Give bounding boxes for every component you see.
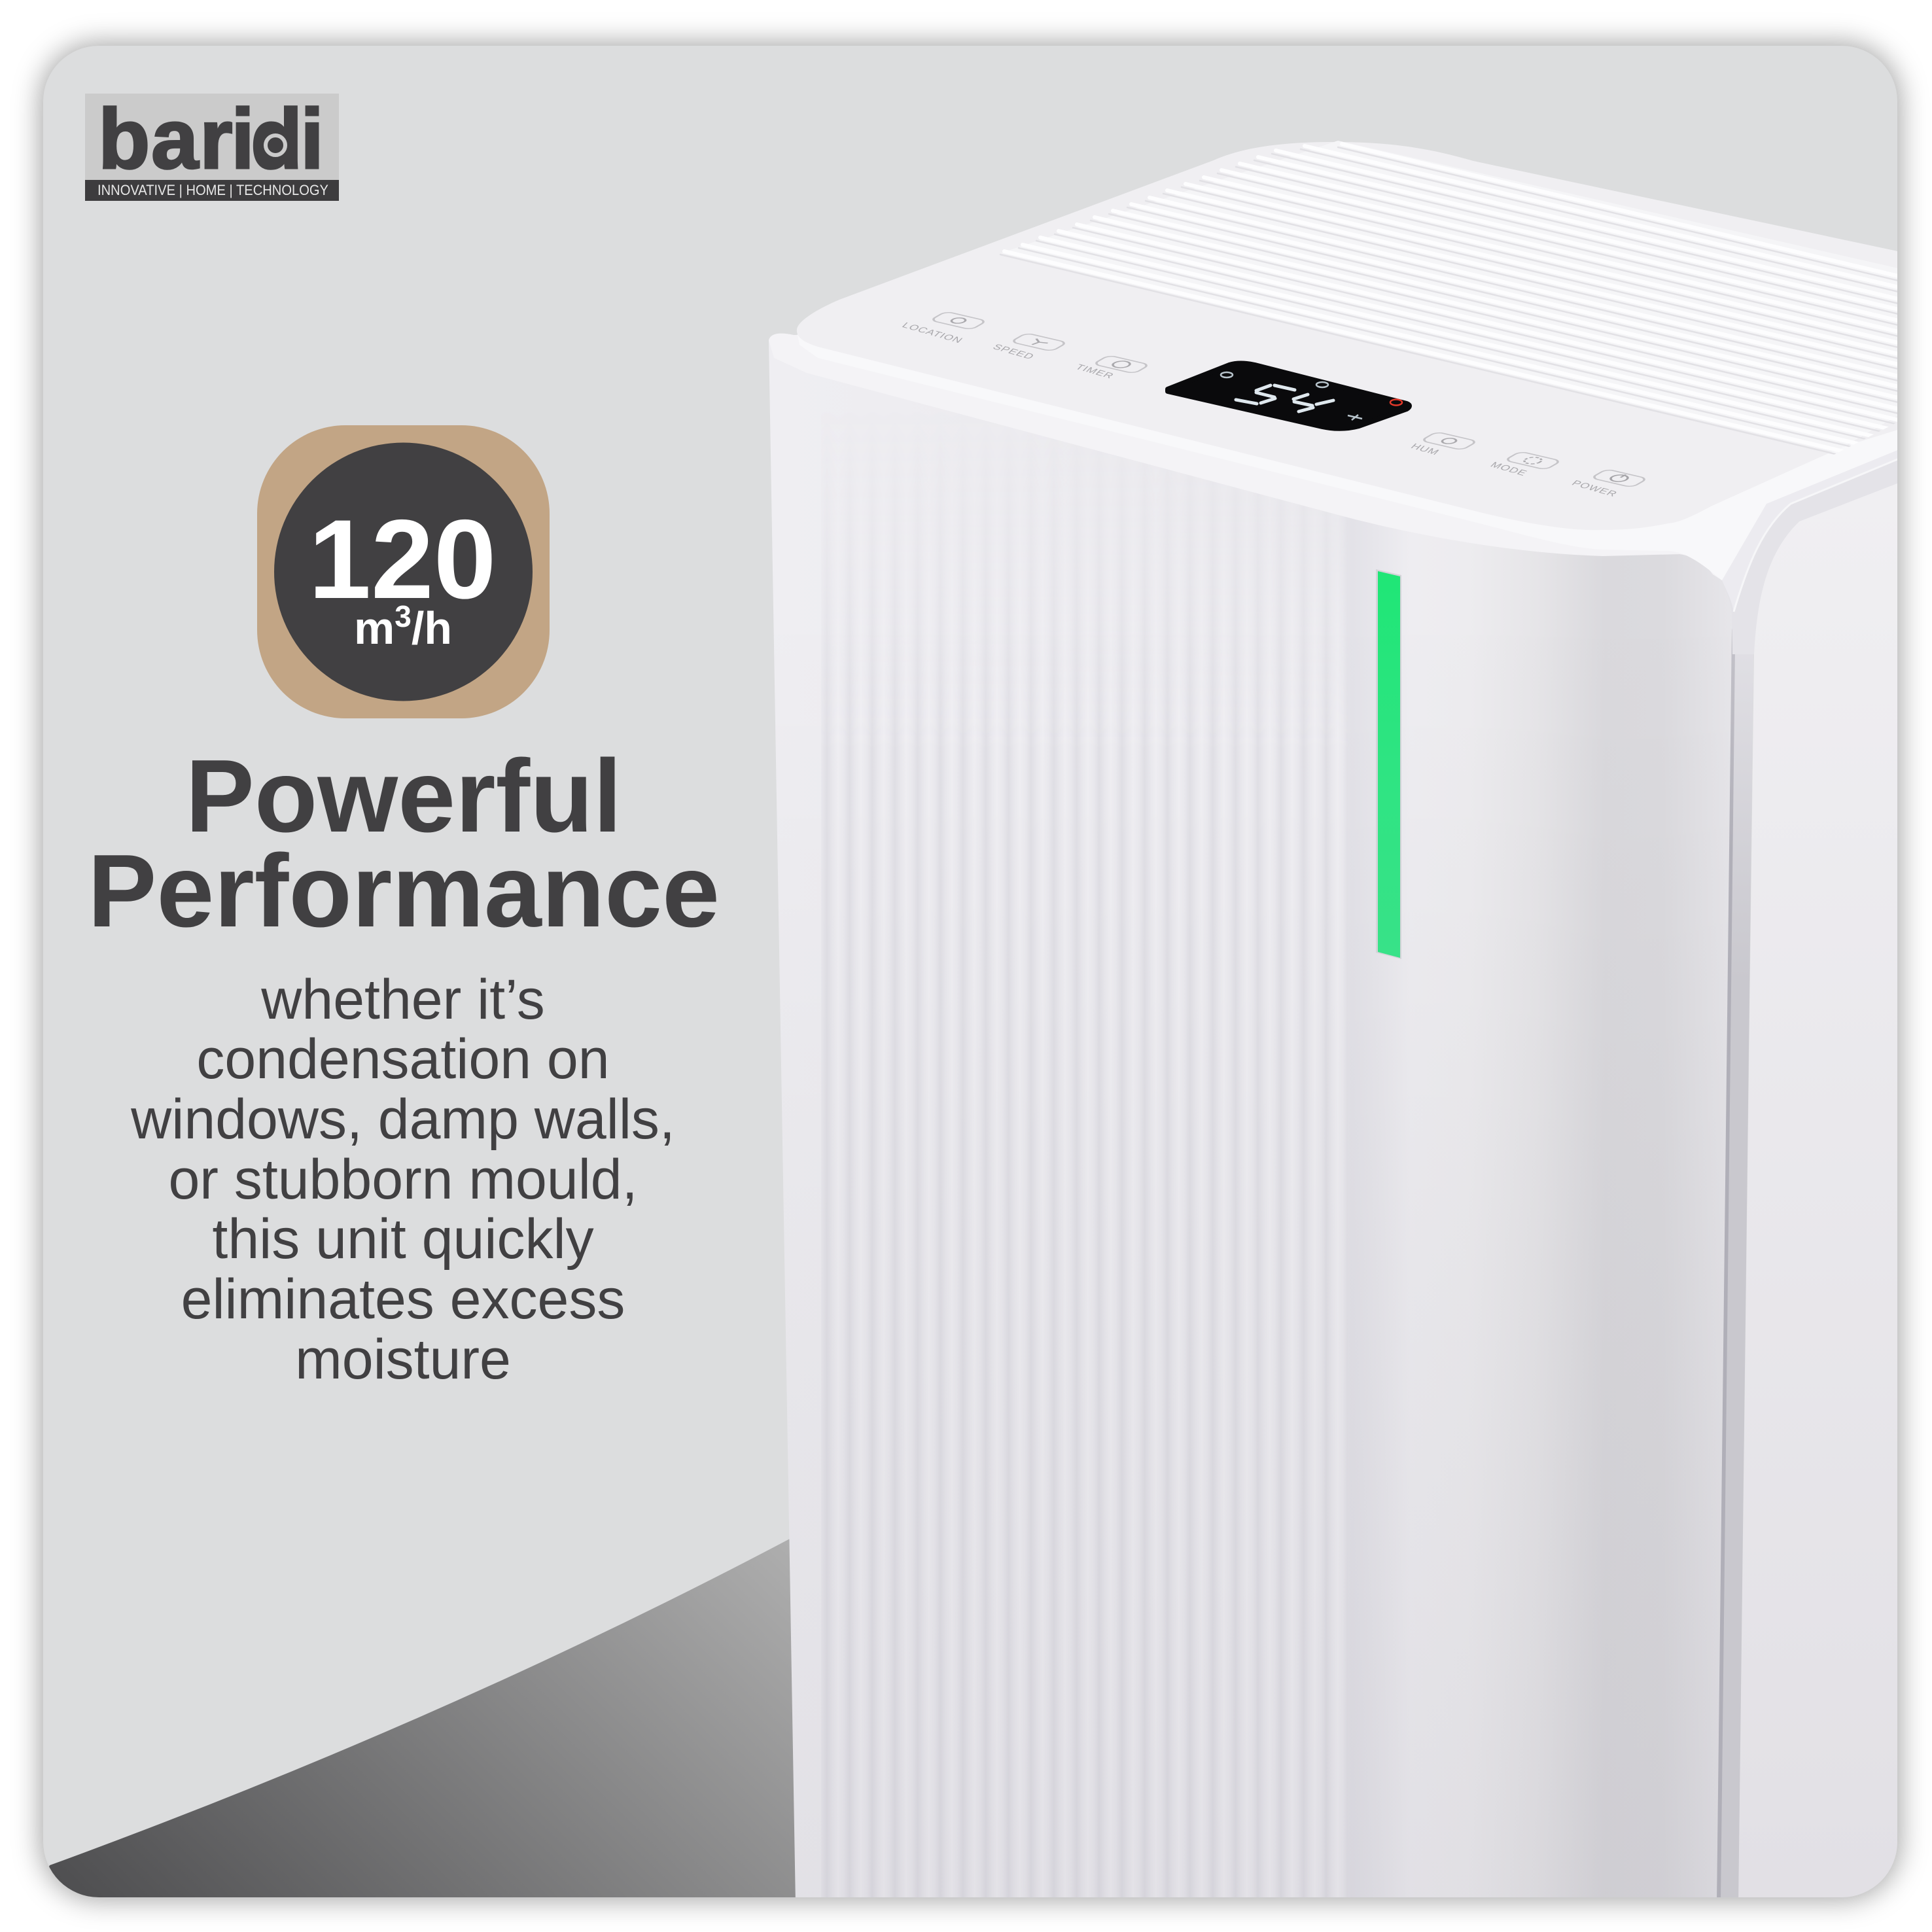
- rim band under lid: [769, 334, 1721, 580]
- logo background: [85, 94, 339, 181]
- label: hum: HUM: [1409, 442, 1441, 457]
- corner shading: [787, 1366, 1722, 1897]
- badge number: 120: [309, 497, 496, 622]
- body text: eliminates excess: [181, 1268, 625, 1331]
- label: timer: TIMER: [1073, 363, 1116, 380]
- button: location: [930, 311, 987, 330]
- floor shadow wedge: [26, 1538, 801, 1910]
- button: mode: [1505, 451, 1561, 470]
- badge unit: 3: [395, 599, 412, 633]
- logo d ring: [260, 130, 291, 161]
- label: mode: MODE: [1488, 461, 1530, 478]
- vent ridges: [1000, 141, 1904, 470]
- front face ribs: [824, 608, 1339, 1897]
- groove between panels: [1721, 661, 1752, 1897]
- button: timer: [1093, 355, 1150, 374]
- label: speed: SPEED: [991, 343, 1036, 361]
- badge dark circle: [274, 442, 533, 701]
- title: [88, 739, 720, 949]
- display power icon: [1390, 399, 1402, 406]
- lid: [797, 142, 1904, 530]
- badge tan background: [257, 425, 550, 718]
- body text: condensation on: [196, 1028, 610, 1091]
- label: power: POWER: [1570, 479, 1619, 499]
- body text: windows, damp walls,: [130, 1088, 675, 1151]
- body text: or stubborn mould,: [168, 1148, 638, 1211]
- badge: airflow: [257, 425, 550, 718]
- groove dark edge: [1717, 628, 1735, 1904]
- logo tagline bar: [85, 180, 339, 201]
- body text: this unit quickly: [212, 1208, 594, 1271]
- body text: whether it’s: [260, 968, 545, 1031]
- body text: [130, 968, 675, 1391]
- logo tagline: INNOVATIVE | HOME | TECHNOLOGY: [97, 182, 328, 198]
- corner flare shaded band: [1732, 461, 1897, 654]
- corner flare highlight: [1734, 457, 1904, 612]
- right side panel: [1738, 478, 1904, 1904]
- button: hum: [1421, 432, 1477, 450]
- display screen: [1168, 364, 1409, 429]
- logo: [85, 91, 339, 201]
- product: dehumidifier: [769, 141, 1904, 1910]
- badge unit: m: [354, 603, 395, 654]
- button: speed: [1011, 333, 1067, 351]
- product body front and corner: [769, 262, 1740, 1904]
- corner flare light band: [1722, 448, 1904, 612]
- title: Powerful: [185, 739, 622, 854]
- green indicator light: [1376, 569, 1401, 959]
- title: Performance: [88, 834, 720, 949]
- badge unit: /h: [412, 603, 452, 654]
- label: location: LOCATION: [900, 321, 965, 345]
- body text: moisture: [295, 1328, 511, 1391]
- lid edge band: [797, 330, 1904, 580]
- button: power: [1591, 469, 1647, 487]
- display digits: [1236, 385, 1333, 412]
- display small icons: [1221, 372, 1362, 420]
- logo wordmark: baridi: [98, 91, 324, 186]
